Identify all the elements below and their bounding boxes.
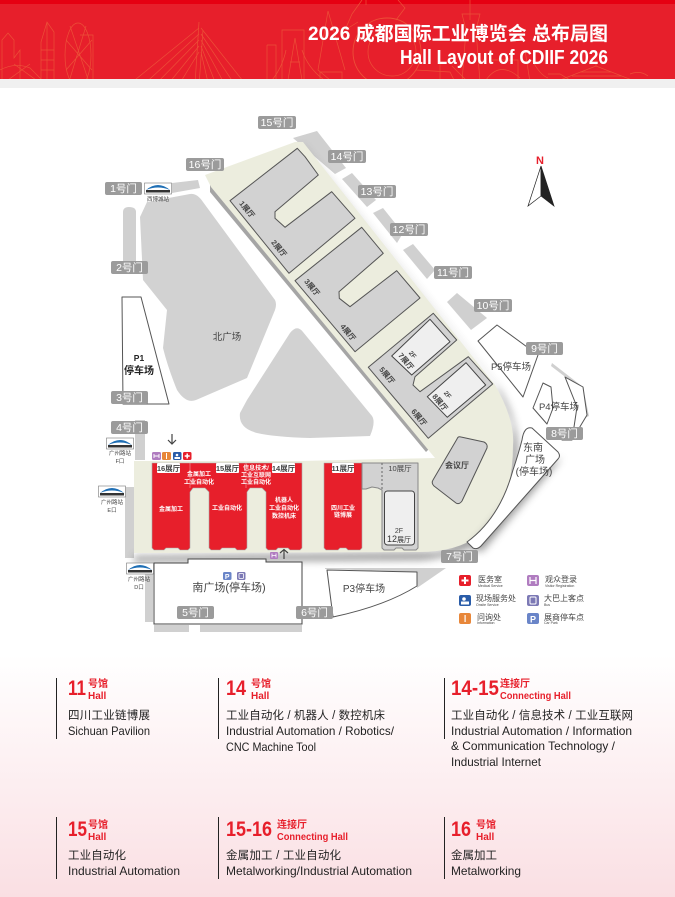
legend: car park: 展商停车点: [544, 612, 584, 622]
header banner: [0, 0, 675, 88]
legend: medical: Medical Service: [478, 584, 503, 588]
left-edge shadow: [210, 182, 430, 452]
south plaza icons: [223, 572, 246, 581]
legend: medical: [459, 574, 503, 588]
info: hall 16: 号馆: [476, 818, 496, 831]
info: connecting hall 15-16: Metalworking/Industrial Automation: [226, 864, 412, 878]
hall themes: 金属加工: [159, 505, 183, 513]
halls 5 to 8: 6展厅: [409, 407, 429, 428]
info: hall 11: Hall: [88, 691, 107, 702]
title: 2026 成都国际工业博览会 总布局图: [308, 22, 608, 45]
info: hall 15: Industrial Automation: [68, 864, 180, 878]
info: hall 16: 16: [451, 818, 471, 841]
halls 3 and 4: [295, 227, 420, 352]
metro station: exit E: 广州路站: [101, 498, 123, 506]
legend: information: 问询处: [477, 612, 501, 622]
halls 5 to 8: 7展厅: [396, 351, 416, 372]
hall 10 and 12: 10展厅: [388, 464, 412, 473]
info: connecting hall 14-15: Connecting Hall: [500, 691, 571, 702]
hall themes: 金属加工: [187, 470, 211, 478]
gate labels: 5号门: [182, 606, 209, 619]
legend: onsite service: Onsite Service: [476, 603, 499, 607]
legend: car park: Car Park: [544, 621, 558, 625]
legend: medical: 医务室: [478, 574, 502, 584]
conference hall: 会议厅: [445, 460, 469, 470]
hall themes: 工业自动化: [241, 478, 271, 486]
east plaza parking: [467, 428, 562, 552]
legend: information: Information: [477, 621, 495, 625]
hall themes: 信息技术/: [243, 464, 269, 472]
info: hall 11: 号馆: [88, 677, 108, 690]
halls 1 and 2: 2展厅: [269, 238, 289, 259]
hall themes: 机器人: [275, 496, 293, 504]
title: [308, 22, 608, 69]
gate labels: 15号门: [261, 116, 293, 129]
parking P1: 停车场: [124, 364, 154, 377]
info: hall 15: 15: [68, 818, 87, 841]
gate labels: 13号门: [361, 185, 393, 198]
metro station: Expo City: [144, 183, 172, 203]
gate labels: 1号门: [110, 182, 137, 195]
parking P5: [478, 325, 538, 397]
metro station: exit F: F口: [116, 458, 124, 465]
hall 11: [324, 463, 362, 550]
metro station: exit D: [126, 563, 154, 591]
gate labels: 6号门: [301, 606, 328, 619]
east plaza parking: 广场: [525, 453, 545, 466]
info: hall 14: [218, 677, 395, 754]
hall 10 and 12: 2F: [395, 528, 403, 535]
compass north arrow: [528, 155, 554, 206]
info: hall 14: 14: [226, 677, 246, 700]
info: hall 16: [444, 817, 521, 879]
hall 10 and 12: 12展厅: [387, 534, 411, 544]
gate labels: 2号门: [116, 261, 143, 274]
conference hall: [432, 437, 487, 504]
info: connecting hall 14-15: & Communication Technology /: [451, 739, 616, 753]
halls 14 15 16: [152, 463, 302, 550]
legend: onsite service: 现场服务处: [476, 593, 516, 603]
info: hall 14: 工业自动化 / 机器人 / 数控机床: [226, 708, 386, 722]
info: hall 11: Sichuan Pavilion: [68, 724, 150, 738]
gate labels: 12号门: [393, 223, 425, 236]
hall themes: 工业自动化: [184, 478, 214, 486]
parking P1: [122, 297, 169, 404]
entrance arrow north side: [168, 434, 176, 444]
info: connecting hall 14-15: 连接厅: [500, 677, 530, 690]
info: connecting hall 14-15: 工业自动化 / 信息技术 / 工业互联网: [451, 708, 633, 722]
parking P3: P3停车场: [343, 582, 385, 595]
halls 5 to 8: 5展厅: [377, 365, 397, 386]
info: connecting hall 14-15: [444, 677, 633, 769]
legend: information: [459, 612, 501, 625]
legend: visitor registration: 观众登录: [545, 574, 577, 584]
skyline line art: [0, 0, 648, 79]
central plaza: [240, 328, 374, 438]
metro station: exit F: [106, 438, 134, 465]
info: hall 15: Hall: [88, 832, 107, 843]
south plaza parking: [154, 559, 302, 624]
halls 5 to 8: 2F: [407, 350, 417, 360]
halls 3 and 4: 3展厅: [302, 277, 322, 298]
gate labels: 4号门: [116, 421, 143, 434]
info: connecting hall 14-15: Industrial Automation / Information: [451, 724, 632, 738]
gate labels: 3号门: [116, 391, 143, 404]
hall tags: [157, 463, 296, 473]
metro station: exit E: [98, 486, 126, 514]
hall 11: 四川工业: [331, 504, 355, 512]
info: hall 14: Hall: [251, 691, 270, 702]
info: hall 16: Metalworking: [451, 864, 521, 878]
halls 1 and 2: 1展厅: [237, 199, 257, 220]
metro station: Expo City: 西博城站: [147, 195, 169, 203]
info: hall 11: [56, 677, 150, 739]
parking P4: [533, 377, 587, 440]
roads: [123, 131, 589, 632]
halls 3 and 4: 4展厅: [338, 322, 358, 343]
service icons north side: [152, 452, 192, 460]
metro station: exit D: D口: [134, 584, 144, 591]
gate labels: 11号门: [437, 266, 469, 279]
legend: bus: 大巴上客点: [544, 593, 584, 603]
hall 11: 链博展: [334, 511, 352, 519]
legend: onsite service: [459, 593, 516, 607]
north plaza: 北广场: [213, 331, 241, 343]
title: Hall Layout of CDIIF 2026: [400, 47, 608, 69]
hall tags: 15展厅: [216, 464, 240, 473]
gate labels: 10号门: [477, 299, 509, 312]
hall themes: [159, 464, 299, 520]
exhibition centre floor: [134, 142, 513, 553]
legend: car park: [527, 612, 584, 625]
parking P1: P1: [134, 353, 144, 363]
info: connecting hall 14-15: Industrial Internet: [451, 755, 542, 769]
metro station: exit D: 广州路站: [128, 575, 150, 583]
hall themes: 数控机床: [272, 512, 296, 520]
north plaza: [140, 194, 276, 401]
info: connecting hall 15-16: Connecting Hall: [277, 832, 348, 843]
info: connecting hall 15-16: 连接厅: [277, 818, 307, 831]
metro station: exit F: 广州路站: [109, 449, 131, 457]
halls 5 to 8: 8展厅: [430, 392, 450, 413]
hall 10 and 12: [362, 463, 418, 550]
gate labels: 7号门: [446, 550, 473, 563]
info: hall 14: 号馆: [251, 677, 271, 690]
info: connecting hall 15-16: [218, 817, 412, 879]
info: connecting hall 14-15: 14-15: [451, 677, 499, 700]
parking P4: P4停车场: [539, 401, 579, 413]
info: hall 11: 四川工业链博展: [68, 708, 150, 722]
south plaza parking: 南广场(停车场): [192, 580, 266, 594]
legend: visitor registration: [527, 574, 577, 588]
halls 5 to 8: 2F: [442, 390, 452, 400]
gate labels: 8号门: [551, 427, 578, 440]
info: hall 14: CNC Machine Tool: [226, 740, 316, 754]
gate labels: 9号门: [531, 342, 558, 355]
metro station: exit E: E口: [107, 507, 117, 514]
info: hall 16: 金属加工: [451, 848, 497, 862]
info: connecting hall 15-16: 金属加工 / 工业自动化: [226, 848, 342, 862]
legend: car park: P: [530, 614, 536, 624]
shadow of exhibition centre: [134, 145, 518, 562]
venue map: [98, 116, 589, 632]
east plaza parking: (停车场): [516, 465, 552, 478]
info: hall 15: 号馆: [88, 818, 108, 831]
parking P5: P5停车场: [491, 361, 531, 373]
info: hall 11: 11: [68, 677, 86, 700]
south entrance icons: [270, 550, 288, 559]
info: hall 15: 工业自动化: [68, 848, 126, 862]
gate labels: 16号门: [189, 158, 221, 171]
gate labels: [105, 116, 583, 619]
halls 1 and 2: [230, 148, 355, 273]
info: hall 15: [56, 817, 180, 879]
legend: bus: Bus: [544, 603, 550, 607]
hall themes: 工业自动化: [212, 504, 242, 512]
hall 11: 11展厅: [332, 464, 355, 473]
hall tags: 14展厅: [272, 464, 296, 473]
info: hall 14: Industrial Automation / Robotics/: [226, 724, 395, 738]
parking P3: [327, 570, 417, 617]
halls 5 to 8: [368, 313, 493, 438]
east plaza parking: 东南: [523, 441, 543, 454]
legend: bus: [527, 593, 584, 607]
hall themes: 工业自动化: [269, 504, 299, 512]
compass north arrow: N: [536, 155, 544, 167]
map legend: [459, 574, 584, 625]
info: hall 16: Hall: [476, 832, 495, 843]
info: connecting hall 15-16: 15-16: [226, 818, 272, 841]
gate labels: 14号门: [331, 150, 363, 163]
hall themes: 工业互联网: [241, 471, 271, 479]
south plaza icons: P: [225, 574, 230, 581]
hall tags: 16展厅: [157, 464, 181, 473]
legend: visitor registration: Visitor Registration: [545, 584, 574, 588]
